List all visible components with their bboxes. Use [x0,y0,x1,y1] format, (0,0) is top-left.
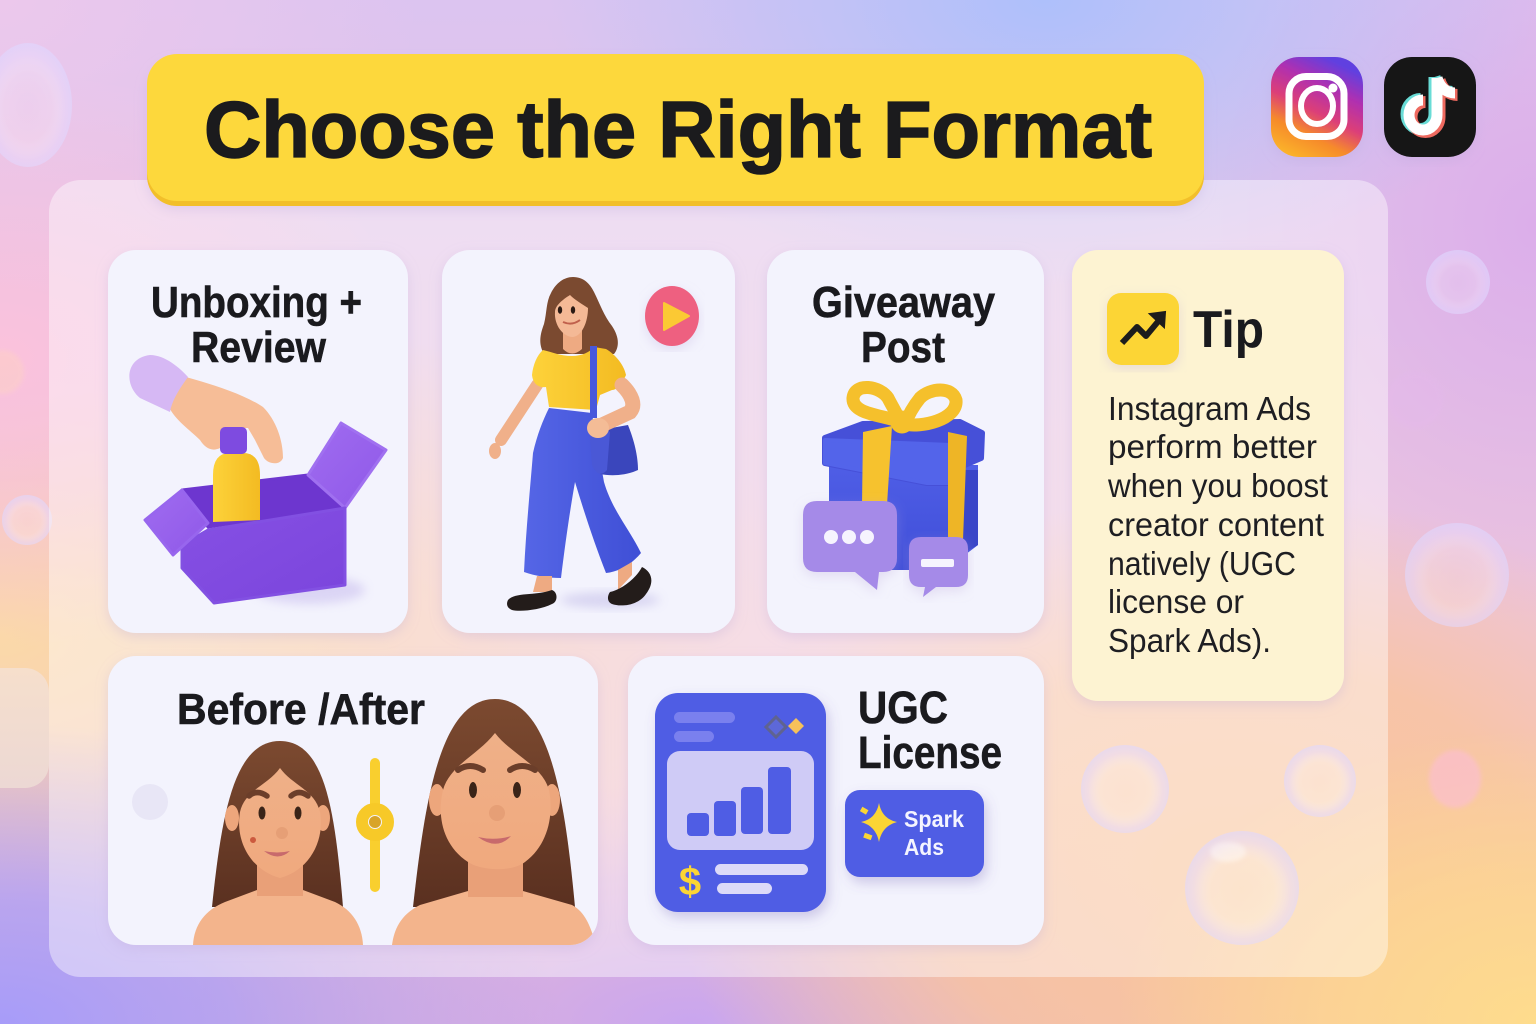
card: ugc license [628,656,1044,945]
spark ads text [904,806,964,860]
tip body text: Spark Ads). [1108,622,1271,659]
chat bubble: small [909,537,968,597]
heading: unboxing + review [151,278,362,372]
bubble: top left [0,43,72,167]
heading: unboxing + review: Review [191,323,327,372]
dollar sign: $ [679,860,701,904]
heading: ugc license: UGC [858,682,948,733]
neck and face [563,330,582,354]
tip body text: Instagram Ads [1108,390,1311,427]
heading: unboxing + review: Unboxing + [151,278,362,327]
tip body text: perform better [1108,428,1317,465]
bottle cap [220,427,247,454]
bubble: right upper [1426,250,1490,314]
heading: giveaway post: Giveaway [812,278,995,327]
figure: after [392,699,596,945]
bubble: right pink [1429,750,1481,808]
heading: giveaway post: Post [861,323,945,372]
figure: before [193,741,363,945]
tip body text: when you boost [1107,467,1328,504]
right arm [602,385,633,425]
spark ads text: Spark [904,806,964,832]
decorative dot [132,784,168,820]
chat bubble: large [803,501,897,590]
card: before / after [108,656,598,945]
card: walking creator [442,250,735,633]
bottle [213,453,260,522]
decorative bubbles [0,43,1509,808]
bubble: left middle [2,495,52,545]
illustration: gift box [825,387,982,570]
block: left cream tile [0,668,49,788]
title: Choose the Right Format [204,85,1152,174]
bubble: panel two [1284,745,1356,817]
heading: before / after: Before /After [177,685,425,734]
icon: tiktok [1384,57,1476,157]
main glass panel [49,180,1388,977]
illustration: woman walking [489,277,660,611]
heading: giveaway post [812,278,995,372]
icon: trending arrow [1107,293,1179,365]
left arm [501,385,537,440]
bow [853,387,956,427]
panel bubbles [1081,745,1356,945]
tip body text [1107,390,1328,659]
illustration: hand and box [129,355,386,604]
hand [129,355,283,463]
ad dashboard card [655,693,826,912]
icon: play button [645,286,699,346]
shirt [532,347,626,410]
spark ads badge [845,790,984,877]
bar chart [667,751,814,850]
tip body text: license or [1108,583,1244,620]
icon: instagram [1271,57,1363,157]
card: tip [1072,250,1344,701]
card: unboxing + review [108,250,408,633]
title banner [147,54,1204,206]
hair [540,277,618,354]
tip body text: natively (UGC [1108,545,1296,582]
card: giveaway post [767,250,1044,633]
bubble: panel three [1185,831,1299,945]
slider [362,758,388,892]
pants [524,408,641,578]
heading: tip: Tip [1193,301,1264,359]
legs [533,576,552,592]
heading: ugc license [858,682,1002,778]
spark ads text: Ads [904,834,944,860]
bubble: left peach spot [0,350,24,394]
shoes [507,590,556,611]
tip body text: creator content [1108,506,1324,543]
bubble: right faint [1387,372,1443,428]
icon: sparkle [860,803,897,842]
diamonds [766,717,786,737]
bubble: right large [1405,523,1509,627]
bag [590,346,638,475]
heading: ugc license: License [858,727,1002,778]
bubble: panel one [1081,745,1169,833]
